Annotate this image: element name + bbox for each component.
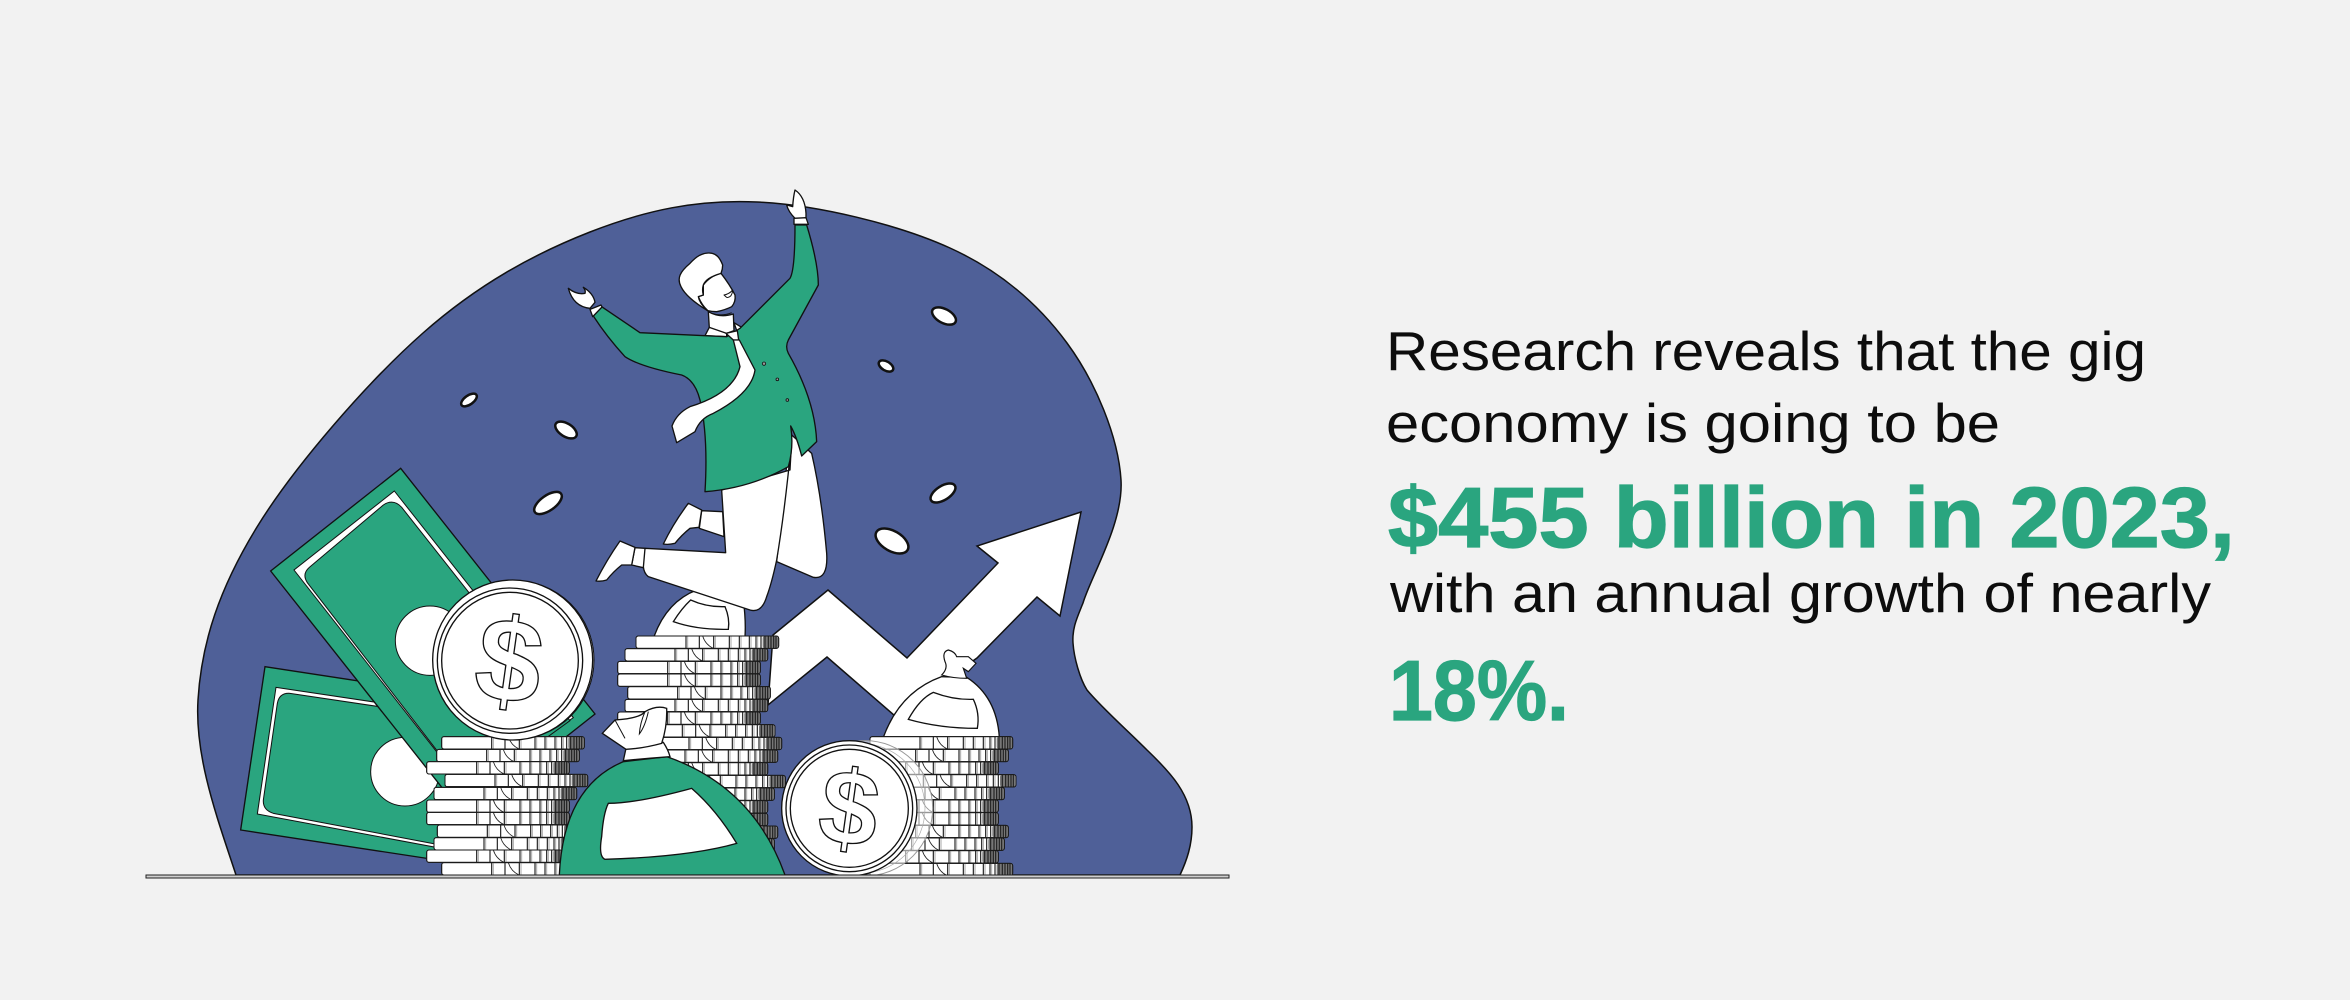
- growth arrow: [768, 512, 1081, 716]
- jumping man: [568, 190, 827, 611]
- back foot: [663, 503, 724, 544]
- front leg: [643, 440, 792, 611]
- right hand: [787, 190, 808, 224]
- text block: [1386, 320, 2235, 739]
- left hand: [568, 287, 602, 317]
- white bag behind man: [654, 590, 745, 637]
- tie: [672, 331, 755, 443]
- dollar coin front: $: [812, 747, 886, 871]
- coin stack left: [427, 737, 588, 875]
- dollar coin front: [782, 741, 933, 876]
- head: [679, 253, 735, 312]
- large dollar coin: $: [467, 591, 551, 731]
- green jacket: [593, 225, 818, 492]
- banknotes and coin stack left: [241, 468, 620, 875]
- front banknote: [271, 468, 595, 817]
- back leg: [777, 433, 827, 578]
- statement line 3: with an annual growth of nearly: [1389, 562, 2212, 624]
- coin stack centre: [618, 636, 785, 876]
- jacket buttons: [762, 362, 789, 401]
- background blob: [198, 202, 1192, 875]
- green money bag: [559, 707, 785, 875]
- highlighted growth figure: 18%.: [1389, 644, 1569, 739]
- neck and collar: [705, 312, 742, 337]
- flying coins: [459, 304, 959, 559]
- ground line: [146, 875, 1229, 878]
- large dollar coin: [433, 580, 594, 740]
- coin stack right: [856, 737, 1016, 876]
- statement line 2: economy is going to be: [1386, 392, 2000, 454]
- coin stacks, bags and coin centre: [559, 590, 1016, 876]
- statement line 1: Research reveals that the gig: [1386, 320, 2146, 382]
- highlighted amount: $455 billion in 2023,: [1388, 471, 2235, 566]
- illustration: man jumping on money: [146, 190, 1229, 878]
- white money bag right: [883, 650, 999, 737]
- back banknote: [241, 667, 527, 870]
- front foot: [596, 541, 645, 581]
- small white bag behind left stack: [560, 793, 620, 875]
